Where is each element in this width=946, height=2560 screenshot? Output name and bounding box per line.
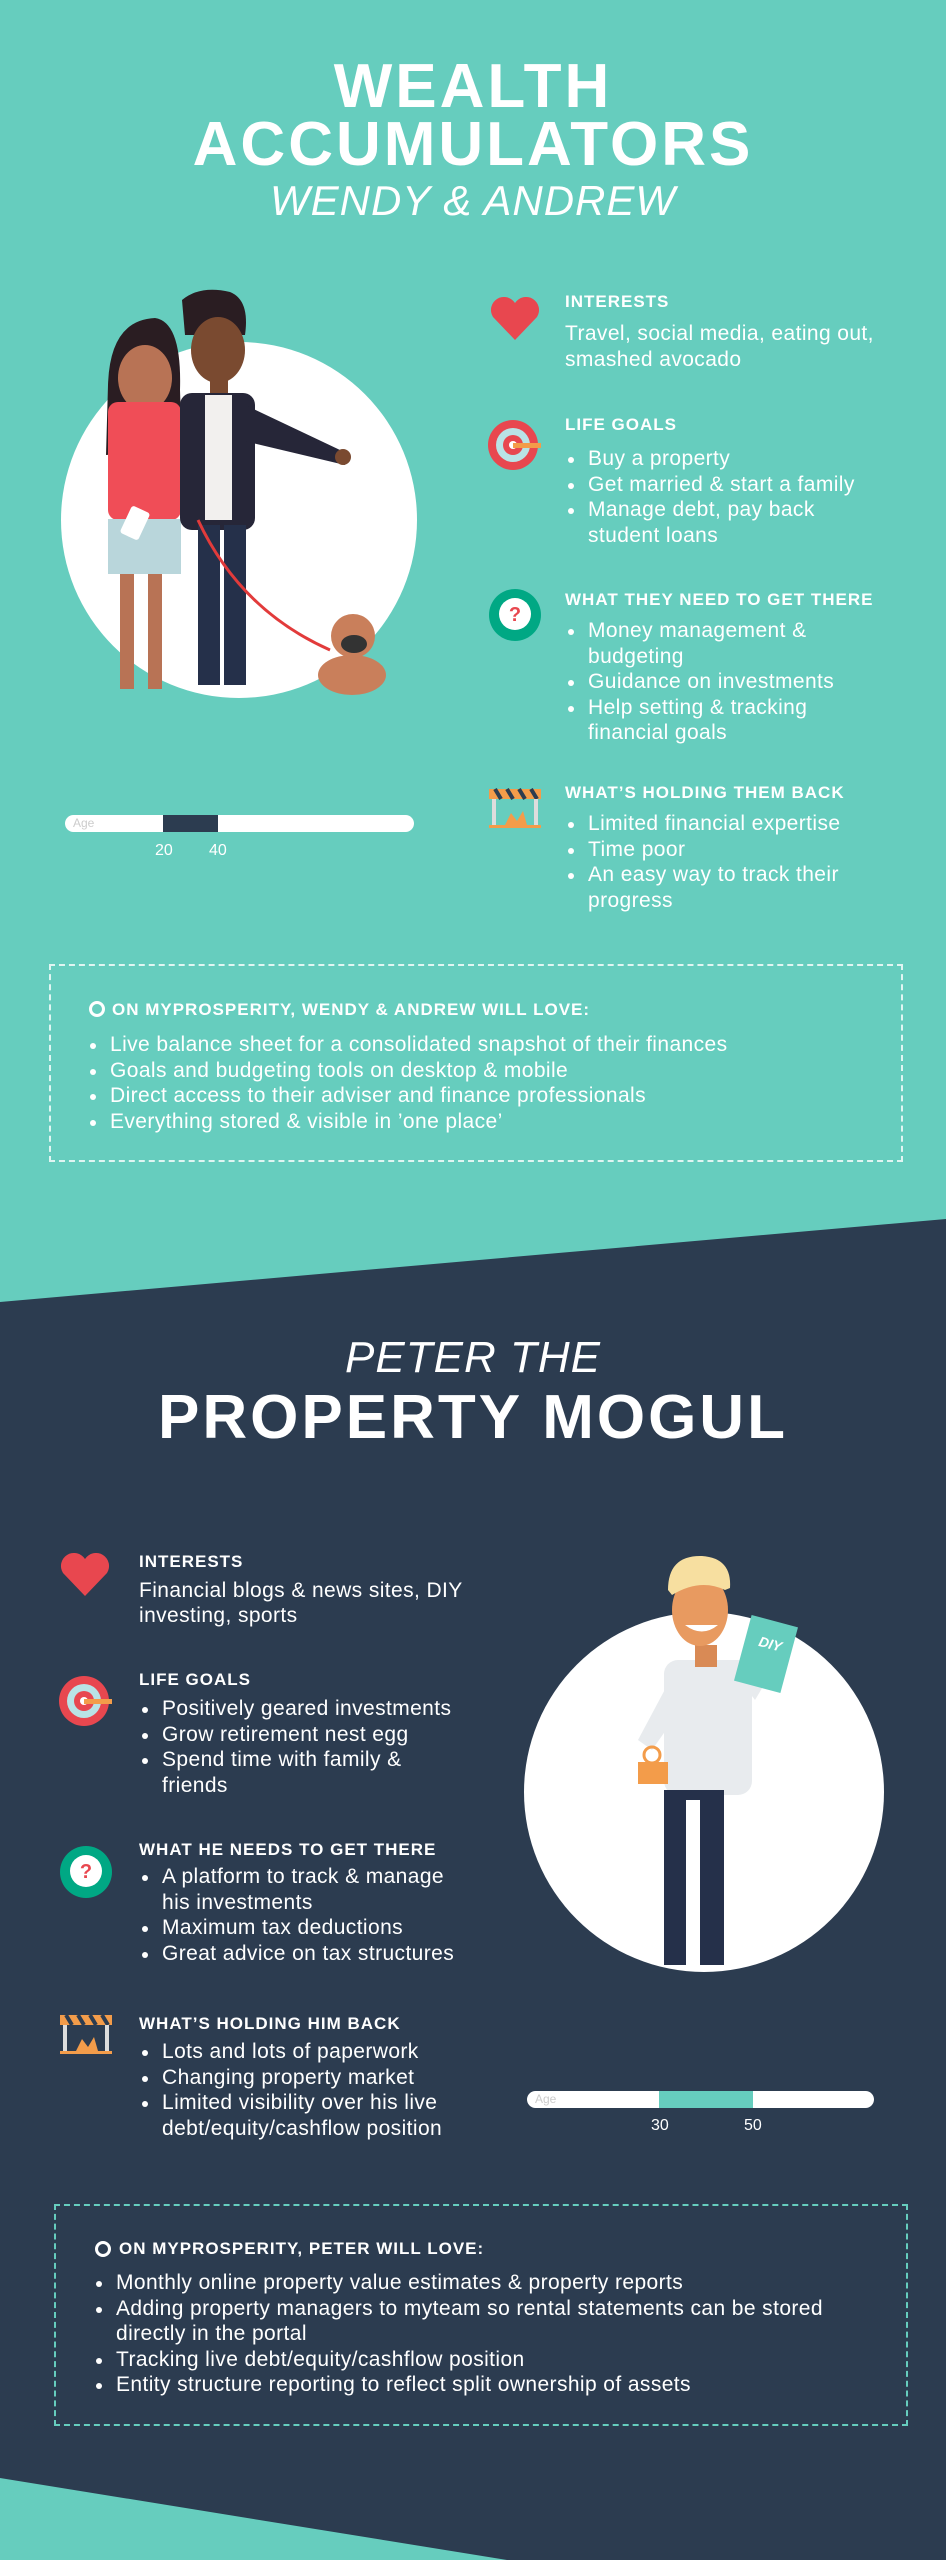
callout: peter will love [54, 2204, 908, 2426]
what they need: financial goals [588, 721, 727, 744]
holding him back: debt/equity/cashflow position [162, 2116, 442, 2140]
callout: wendy & andrew will love: Direct access to their adviser and finance professionals [110, 1084, 646, 1107]
leash [198, 520, 330, 650]
icon: heart [491, 297, 539, 340]
callout: peter will love: Tracking live debt/equity/cashflow position [116, 2348, 525, 2370]
life goals: Buy a property [588, 447, 730, 470]
title: WEALTH [334, 52, 612, 121]
icon: question 2: ? [80, 1861, 92, 1883]
holding them back: WHAT’S HOLDING THEM BACK [565, 783, 845, 802]
callout: peter will love: Adding property managers to myteam so rental statements can be stored [116, 2296, 823, 2320]
holding them back: Limited financial expertise [588, 812, 840, 835]
life goals: Manage debt, pay back [588, 498, 815, 521]
holding him back: Limited visibility over his live [162, 2091, 437, 2114]
illustration: peter [524, 1556, 884, 1972]
callout: peter will love: Entity structure reporting to reflect split ownership of assets [116, 2373, 691, 2396]
what he needs: Great advice on tax structures [162, 1942, 454, 1964]
holding him back: Lots and lots of paperwork [162, 2040, 419, 2063]
life goals 2: LIFE GOALS [139, 1670, 251, 1689]
holding him back: Changing property market [162, 2066, 414, 2088]
subtitle: WENDY & ANDREW [270, 177, 676, 224]
age bar 2: Age [535, 2092, 556, 2106]
age bar 1: 20 [155, 842, 173, 859]
interests: INTERESTS [565, 292, 669, 311]
icon: question bubble: ? [509, 604, 521, 626]
icon: target [488, 420, 541, 470]
what they need: Help setting & tracking [588, 696, 807, 718]
what he needs: Maximum tax deductions [162, 1916, 403, 1939]
icon: question 2 [60, 1846, 112, 1898]
interests 2: INTERESTS [139, 1552, 243, 1571]
callout: peter will love: ON MYPROSPERITY, PETER WILL LOVE: [119, 2239, 484, 2258]
interests 2 [139, 1552, 463, 1627]
title: ACCUMULATORS [193, 110, 753, 179]
icon: heart 2 [60, 1553, 109, 1596]
holding them back: progress [588, 888, 673, 912]
holding him back [139, 2014, 442, 2140]
what they need: WHAT THEY NEED TO GET THERE [565, 590, 873, 609]
what he needs: WHAT HE NEEDS TO GET THERE [139, 1840, 436, 1859]
title [193, 52, 753, 179]
icon: logo [89, 1001, 105, 1017]
what he needs: his investments [162, 1890, 313, 1914]
man [182, 290, 246, 335]
what they need: Money management & [588, 619, 806, 642]
holding them back: Time poor [588, 838, 685, 860]
icon: barrier 2 [60, 2015, 112, 2054]
life goals: LIFE GOALS [565, 415, 677, 434]
interests: smashed avocado [565, 348, 741, 371]
subtitle 2: PETER THE [345, 1333, 601, 1382]
age bar 2: 30 [651, 2117, 669, 2134]
woman [106, 318, 182, 455]
age bar 1 [65, 815, 414, 859]
callout: wendy & andrew will love [49, 964, 903, 1162]
age bar 1: Age [73, 816, 94, 830]
life goals: Get married & start a family [588, 472, 855, 496]
illustration: peter: DIY [757, 1633, 785, 1655]
callout: wendy & andrew will love: Everything stored & visible in ’one place’ [110, 1110, 503, 1132]
age bar 2 [527, 2091, 874, 2134]
illustration: couple with dog [61, 290, 417, 698]
icon: target 2 [59, 1676, 112, 1726]
title 2: PROPERTY MOGUL [158, 1383, 788, 1452]
age bar 2: 50 [744, 2117, 762, 2134]
age bar 1: 40 [209, 842, 227, 859]
life goals 2: Positively geared investments [162, 1697, 451, 1720]
interests 2: investing, sports [139, 1604, 298, 1627]
life goals [565, 415, 855, 546]
callout: wendy & andrew will love: Live balance sheet for a consolidated snapshot of their finances [110, 1033, 728, 1056]
icon: barrier [489, 788, 541, 828]
callout: wendy & andrew will love: Goals and budgeting tools on desktop & mobile [110, 1058, 568, 1082]
life goals: student loans [588, 524, 718, 546]
holding them back [565, 783, 845, 912]
what he needs: A platform to track & manage [162, 1865, 444, 1888]
callout: peter will love: directly in the portal [116, 2322, 307, 2345]
life goals 2: friends [162, 1774, 228, 1796]
callout: wendy & andrew will love: ON MYPROSPERITY, WENDY & ANDREW WILL LOVE: [112, 1000, 590, 1019]
what they need: budgeting [588, 644, 684, 668]
what he needs [139, 1840, 454, 1964]
life goals 2 [139, 1670, 451, 1796]
holding him back: WHAT’S HOLDING HIM BACK [139, 2014, 401, 2033]
what they need [565, 590, 873, 744]
life goals 2: Spend time with family & [162, 1748, 402, 1771]
interests 2: Financial blogs & news sites, DIY [139, 1579, 463, 1602]
dog [318, 655, 386, 695]
what they need: Guidance on investments [588, 670, 834, 693]
holding them back: An easy way to track their [588, 863, 839, 886]
callout: peter will love: Monthly online property value estimates & property reports [116, 2271, 683, 2294]
icon: question bubble [489, 589, 541, 641]
interests: Travel, social media, eating out, [565, 322, 874, 345]
life goals 2: Grow retirement nest egg [162, 1722, 409, 1746]
interests [565, 292, 874, 371]
icon: logo 2 [95, 2241, 111, 2257]
